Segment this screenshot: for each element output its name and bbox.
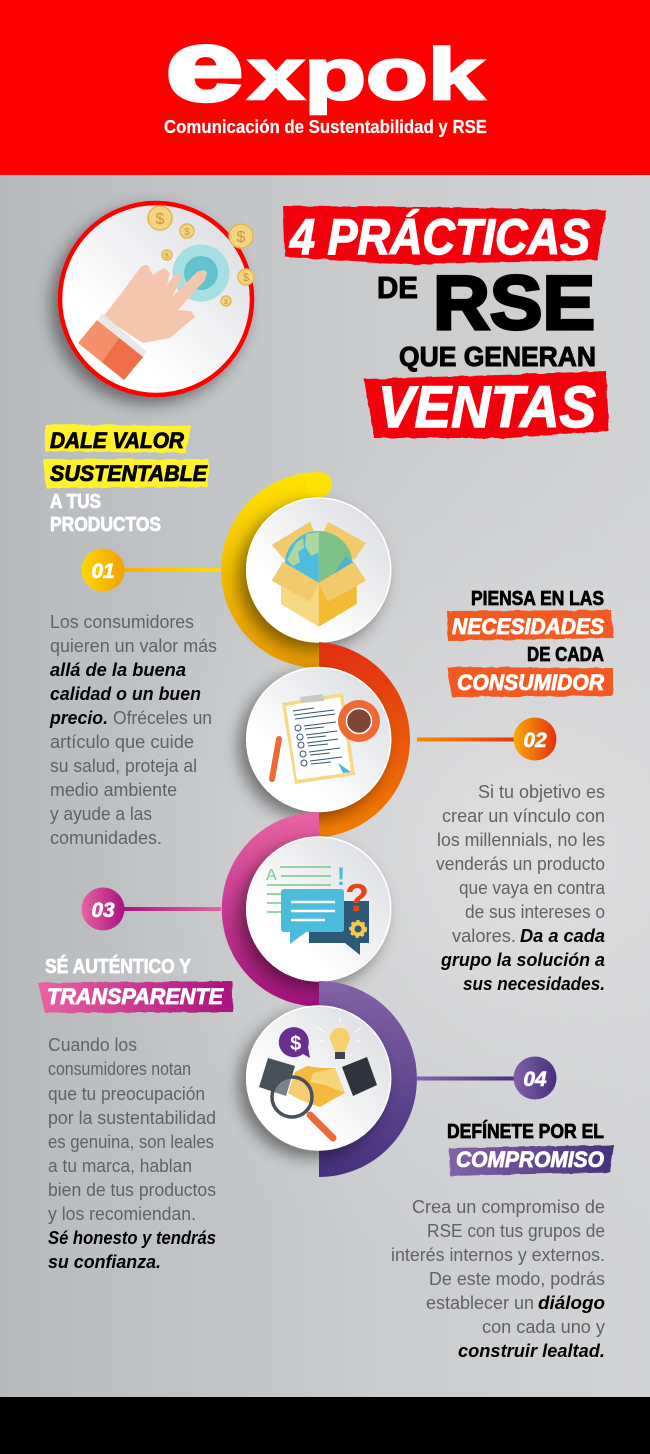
heading 4: defínete por el compromiso bbox=[447, 1120, 614, 1176]
timeline item 1: ring and icon bbox=[221, 472, 391, 668]
text block 3: Cuando los bbox=[48, 1035, 137, 1055]
icon: hand bbox=[78, 265, 207, 380]
tagline: Comunicación de Sustentabilidad y RSE bbox=[164, 116, 487, 137]
logo: e bbox=[166, 10, 243, 122]
text block 1: quieren un valor más bbox=[50, 636, 217, 656]
header band bbox=[0, 0, 650, 175]
icon: chat bubbles: A bbox=[266, 867, 277, 884]
icon: coins: $ bbox=[243, 272, 249, 284]
subheading: a tus productos: PRODUCTOS bbox=[50, 514, 161, 536]
text block 3: por la sustentabilidad bbox=[48, 1108, 216, 1128]
banner: ventas: VENTAS bbox=[378, 375, 596, 440]
text block 4: De este modo, podrás bbox=[429, 1269, 605, 1289]
hero illustration: hand pressing coin button bbox=[60, 203, 254, 395]
text block 3: bien de tus productos bbox=[48, 1180, 216, 1200]
text block 1: precio. bbox=[49, 708, 108, 728]
text block 1: su salud, proteja al bbox=[50, 756, 197, 776]
banner: 4 prácticas: 4 PRÁCTICAS bbox=[289, 209, 590, 265]
connector and number 04: 04 bbox=[523, 1068, 547, 1091]
heading: que generan: QUE GENERAN bbox=[399, 341, 596, 372]
text block 3: consumidores notan bbox=[48, 1059, 191, 1079]
text block 3: a tu marca, hablan bbox=[48, 1156, 192, 1176]
text block 4: construir lealtad. bbox=[458, 1341, 605, 1361]
text block 3: su confianza. bbox=[48, 1252, 161, 1272]
text block 4: Crea un compromiso de bbox=[412, 1197, 605, 1217]
text block 2: grupo la solución a bbox=[440, 950, 605, 970]
connector and number 02: 02 bbox=[523, 729, 547, 752]
connector and number 01 bbox=[82, 548, 221, 592]
heading 3: sé auténtico y transparente bbox=[38, 955, 233, 1013]
text block 4: con cada uno y bbox=[482, 1317, 605, 1337]
connector and number 02 bbox=[417, 718, 556, 760]
text block 2: valores. bbox=[452, 926, 516, 946]
heading 2: piensa en las necesidades de cada consumidor: PIENSA EN LAS bbox=[471, 588, 604, 610]
icon: coins: $ bbox=[165, 253, 169, 260]
connector and number 03 bbox=[82, 888, 221, 930]
connector and number 04 bbox=[417, 1056, 556, 1100]
footer band bbox=[0, 1397, 650, 1454]
text block 1: artículo que cuide bbox=[50, 732, 194, 752]
icon: coins: $ bbox=[224, 299, 228, 306]
heading 2: piensa en las necesidades de cada consumidor bbox=[447, 588, 614, 697]
text block 4 bbox=[391, 1197, 605, 1361]
text block 3: y los recomiendan. bbox=[48, 1204, 196, 1224]
text block 3 bbox=[48, 1035, 216, 1272]
text block 3: es genuina, son leales bbox=[48, 1132, 214, 1152]
icon: handshake, idea and magnifier: $ bbox=[290, 1033, 301, 1055]
heading: de: DE bbox=[377, 270, 418, 305]
icon: coins: $ bbox=[184, 227, 190, 238]
icon: clipboard, cup and pen bbox=[272, 693, 380, 784]
text block 4: RSE con tus grupos de bbox=[427, 1221, 605, 1241]
text block 2: venderás un producto bbox=[436, 854, 605, 874]
text block 2: los millennials, no les bbox=[437, 830, 605, 850]
text block 1: y ayude a las bbox=[50, 804, 152, 824]
text block 4: interés internos y externos. bbox=[391, 1245, 605, 1265]
text block 2: Da a cada bbox=[520, 926, 605, 946]
text block 2: que vaya en contra bbox=[459, 878, 606, 898]
title block bbox=[283, 206, 609, 440]
text block 3: que tu preocupación bbox=[48, 1084, 205, 1104]
icon: chat bubbles: ? bbox=[345, 877, 369, 920]
highlight: sustentable: SUSTENTABLE bbox=[50, 461, 208, 486]
heading 4: defínete por el compromiso: DEFÍNETE POR EL bbox=[447, 1120, 604, 1143]
text block 4: diálogo bbox=[538, 1293, 605, 1313]
logo: xpok bbox=[248, 35, 485, 115]
text block 1: allá de la buena bbox=[50, 660, 186, 680]
logo bbox=[166, 10, 485, 122]
heading 2: piensa en las necesidades de cada consumidor: DE CADA bbox=[527, 644, 604, 666]
banner: consumidor: CONSUMIDOR bbox=[457, 670, 604, 695]
heading: RSE: RSE bbox=[433, 261, 595, 346]
text block 1: calidad o un buen bbox=[50, 684, 201, 704]
icon: chat bubbles bbox=[266, 863, 369, 955]
highlight: dale valor: DALE VALOR bbox=[50, 428, 184, 453]
timeline item 3: ring and icon bbox=[222, 812, 391, 1006]
text block 1: Los consumidores bbox=[50, 612, 194, 632]
banner: transparente: TRANSPARENTE bbox=[47, 984, 224, 1009]
text block 1: Ofréceles un bbox=[113, 708, 212, 728]
text block 3: Sé honesto y tendrás bbox=[48, 1228, 216, 1248]
connector and number 01: 01 bbox=[91, 560, 115, 583]
subheading: a tus productos: A TUS bbox=[50, 491, 101, 513]
heading 1: dale valor sustentable a tus productos bbox=[43, 424, 209, 536]
heading 3: sé auténtico y transparente: SÉ AUTÉNTICO Y bbox=[45, 955, 192, 978]
text block 2 bbox=[436, 782, 606, 994]
banner: necesidades: NECESIDADES bbox=[452, 614, 604, 639]
icon: chat bubbles: ! bbox=[337, 863, 345, 891]
subheading: a tus productos bbox=[50, 491, 161, 536]
icon: coins: $ bbox=[156, 211, 165, 228]
text block 1 bbox=[49, 612, 217, 848]
text block 2: sus necesidades. bbox=[463, 974, 605, 994]
text block 2: de sus intereses o bbox=[465, 902, 605, 922]
text block 1: medio ambiente bbox=[50, 780, 177, 800]
timeline item 2: ring and icon bbox=[247, 642, 410, 838]
icon: touch button bbox=[172, 244, 230, 302]
text block 2: crear un vínculo con bbox=[442, 806, 605, 826]
icon: box with globe bbox=[272, 522, 366, 627]
icon: coins bbox=[148, 206, 254, 306]
icon: handshake, idea and magnifier bbox=[259, 1017, 377, 1138]
icon: coins: $ bbox=[237, 229, 246, 246]
connector and number 03: 03 bbox=[91, 899, 115, 922]
banner: compromiso: COMPROMISO bbox=[456, 1147, 604, 1172]
text block 2: Si tu objetivo es bbox=[478, 782, 605, 802]
text block 1: comunidades. bbox=[50, 828, 162, 848]
timeline item 4: ring and icon bbox=[247, 981, 417, 1177]
text block 4: establecer un bbox=[426, 1293, 534, 1313]
